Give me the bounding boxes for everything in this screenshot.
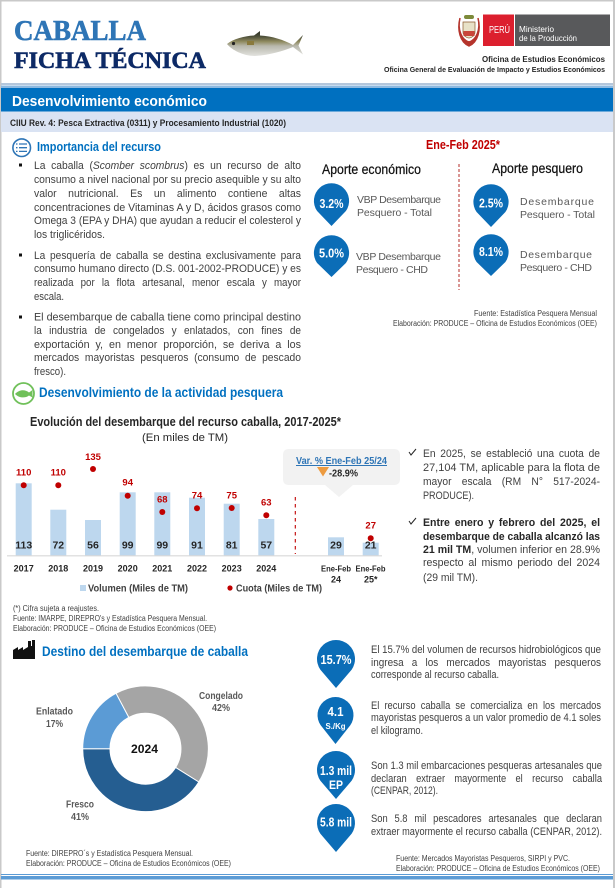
volume labels: 21 bbox=[365, 540, 377, 552]
text block: importancia del recurso: fresco). bbox=[34, 366, 66, 378]
text block: cuota y desembarque: Entre enero y febrero del 2025, el bbox=[423, 517, 600, 529]
quota labels: 63 bbox=[261, 498, 272, 508]
donut chart: 17% bbox=[46, 719, 63, 730]
volume labels: 29 bbox=[330, 540, 342, 552]
source note: mercados: Fuente: Mercados Mayoristas Pesqueros, SIRPI y PVC. bbox=[396, 854, 570, 863]
stat: 15.7%: 15.7% bbox=[320, 653, 352, 667]
axis labels: 2022 bbox=[187, 564, 207, 574]
volume labels: 91 bbox=[191, 540, 203, 552]
volume labels: 113 bbox=[15, 540, 32, 552]
source note: chart: Fuente: IMARPE, DIREPRO's y Estadística Pesquera Mensual. bbox=[13, 614, 207, 623]
axis labels: 2023 bbox=[222, 564, 242, 574]
label: desembarque CHD bbox=[520, 249, 592, 274]
stat: 15.7%: corresponde al recurso caballa. bbox=[371, 669, 499, 681]
stat: 1.3 mil EP: EP bbox=[329, 778, 343, 792]
source note: aporte: Fuente: Estadística Pesquera Mensual bbox=[474, 309, 597, 318]
axis labels: Ene-Feb bbox=[356, 564, 386, 574]
stat: 1.3 mil EP bbox=[317, 751, 603, 799]
volume labels: 72 bbox=[52, 540, 64, 552]
volume labels: 81 bbox=[226, 540, 238, 552]
text block: importancia del recurso bbox=[19, 160, 302, 378]
shield bbox=[458, 15, 480, 46]
text block: importancia del recurso: La pesquería de caballa se destina exclusivamente para bbox=[34, 250, 302, 262]
donut chart: Fresco bbox=[66, 800, 94, 810]
axis labels bbox=[14, 564, 385, 584]
volume labels: 99 bbox=[156, 540, 168, 552]
chart title: (En miles de TM) bbox=[142, 432, 228, 444]
axis labels: 2020 bbox=[118, 564, 138, 574]
axis labels: Ene-Feb bbox=[321, 564, 351, 574]
legend: Volumen (Miles de TM) bbox=[88, 582, 188, 594]
label: desembarque CHD: Desembarque bbox=[520, 249, 592, 261]
label: VBP total bbox=[357, 194, 441, 219]
text block: cuota y desembarque: desembarque de caballa alcanzó las bbox=[423, 531, 600, 543]
office names: Oficina General de Evaluación de Impacto y Estudios Económicos bbox=[384, 65, 605, 74]
axis labels: 2024 bbox=[256, 564, 276, 574]
label: desembarque total: Pesquero - Total bbox=[520, 209, 595, 221]
label: desembarque total bbox=[520, 196, 595, 221]
axis labels: 25* bbox=[364, 574, 378, 584]
label: VBP CHD: Pesquero - CHD bbox=[356, 264, 428, 276]
quota labels: 94 bbox=[122, 478, 134, 488]
text block: cuota y desembarque bbox=[409, 448, 600, 584]
text block: importancia del recurso: La caballa (Scomber scombrus) es un recurso de alto bbox=[34, 160, 301, 172]
text block: importancia del recurso: exportación y, en menor proporción, se deriva a los bbox=[34, 339, 301, 351]
pin: 2.5%: 2.5% bbox=[479, 196, 503, 210]
text block: importancia del recurso: consumo a nivel nacional por su precio asequible y su alto bbox=[34, 174, 301, 186]
axis labels: 24 bbox=[331, 574, 341, 584]
volume labels: 99 bbox=[122, 540, 134, 552]
callout: variation: Var. % Ene-Feb 25/24 bbox=[296, 456, 387, 467]
stat: 5.8 mil bbox=[317, 804, 602, 852]
donut chart: Congelado bbox=[199, 691, 243, 702]
axis labels: 2018 bbox=[48, 564, 68, 574]
heading: Desenvolvimiento de la actividad pesquera: Desenvolvimiento de la actividad pesquera bbox=[39, 384, 283, 400]
source note: chart bbox=[13, 604, 216, 633]
text block: importancia del recurso: realizada por la flota artesanal, menor escala y mayor bbox=[34, 277, 301, 289]
office names: Oficina de Estudios Económicos bbox=[482, 54, 605, 64]
pin: 3.2%: 3.2% bbox=[320, 197, 344, 211]
callout: variation bbox=[283, 449, 400, 497]
text block: cuota y desembarque: respecto al mismo periodo del 2024 bbox=[423, 557, 600, 569]
quota labels: 74 bbox=[192, 490, 203, 502]
stat: 4.1 S./Kg: 4.1 bbox=[328, 705, 344, 719]
text block: cuota y desembarque: (29 mil TM). bbox=[423, 572, 478, 584]
heading: Destino del desembarque de caballa: Destino del desembarque de caballa bbox=[42, 643, 248, 659]
text block: importancia del recurso: consumo humano directo (D.S. 001-2002-PRODUCE) y es bbox=[34, 263, 301, 275]
source note: donut: Fuente: DIREPRO´s y Estadística Pesquera Mensual. bbox=[26, 849, 193, 858]
title: CABALLA bbox=[14, 15, 146, 47]
source note: donut bbox=[26, 849, 231, 868]
quota labels: 27 bbox=[365, 520, 376, 532]
heading: aporte pesquero: Aporte pesquero bbox=[492, 160, 583, 176]
stat: 4.1 S./Kg bbox=[318, 697, 601, 744]
axis labels: 2017 bbox=[14, 564, 34, 574]
text block: cuota y desembarque: En 2025, se estableció una cuota de bbox=[423, 448, 600, 460]
label: VBP total: VBP Desembarque bbox=[357, 194, 441, 206]
label: VBP CHD bbox=[356, 251, 441, 276]
icon: check bbox=[409, 449, 416, 455]
quota labels: 75 bbox=[226, 490, 238, 502]
stat: 1.3 mil EP: 1.3 mil bbox=[320, 764, 352, 778]
pin: 5.0%: 5.0% bbox=[319, 246, 344, 260]
quota dots bbox=[21, 466, 374, 541]
heading: Ene-Feb 2025: Ene-Feb 2025* bbox=[426, 137, 501, 152]
title bbox=[14, 15, 206, 74]
stat: 4.1 S./Kg: el kilogramo. bbox=[371, 725, 423, 737]
quota labels: 68 bbox=[157, 494, 168, 506]
stat: 15.7% bbox=[317, 640, 601, 688]
heading: aporte económico: Aporte económico bbox=[322, 161, 421, 177]
donut chart: 41% bbox=[71, 812, 89, 823]
icon: check bbox=[409, 518, 416, 524]
quota labels bbox=[16, 452, 376, 532]
text block: importancia del recurso: escala. bbox=[34, 291, 64, 303]
text block: cuota y desembarque: PRODUCE). bbox=[423, 490, 474, 502]
text block: importancia del recurso: mercados mayoristas pesqueros (consumo de pescado bbox=[34, 352, 301, 364]
banner: Desenvolvimiento económico: Desenvolvimiento económico bbox=[12, 94, 207, 110]
CIIU band: CIIU Rev. 4: Pesca Extractiva (0311) y Procesamiento Industrial (1020) bbox=[10, 118, 286, 128]
callout: variation: -28.9% bbox=[329, 468, 358, 480]
text block: cuota y desembarque: mayor escala (RM N° 517-2024- bbox=[423, 476, 600, 488]
volume labels bbox=[15, 540, 377, 552]
icon: factory bbox=[13, 640, 35, 659]
source note: chart: (*) Cifra sujeta a reajustes. bbox=[13, 604, 99, 613]
quota labels: 135 bbox=[85, 452, 102, 463]
stat: 5.8 mil: 5.8 mil bbox=[320, 816, 352, 830]
chart title bbox=[30, 415, 341, 444]
icon: fish bbox=[227, 31, 303, 56]
logo: Ministerio de la Producción: Ministerio bbox=[519, 24, 554, 34]
source note: donut: Elaboración: PRODUCE – Oficina de Estudios Económicos (OEE) bbox=[26, 859, 231, 868]
title: FICHA TÉCNICA bbox=[14, 48, 206, 74]
text block: importancia del recurso: la industria de congelados y enlatados, con fines de bbox=[34, 325, 301, 337]
label: desembarque total: Desembarque bbox=[520, 196, 594, 208]
donut chart: 42% bbox=[212, 703, 230, 714]
quota labels: 110 bbox=[16, 468, 31, 478]
label: VBP CHD: VBP Desembarque bbox=[356, 251, 441, 263]
logo: Ministerio de la Producción: de la Producción bbox=[519, 33, 577, 43]
quota labels: 110 bbox=[51, 468, 66, 478]
volume labels: 57 bbox=[260, 540, 272, 552]
source note: chart: Elaboración: PRODUCE – Oficina de Estudios Económicos (OEE) bbox=[13, 624, 216, 633]
text block: importancia del recurso: Omega 3 (EPA y DHA) que ayudan a reducir el colesterol y bbox=[34, 215, 301, 227]
panel: aporte pesquero bbox=[473, 160, 595, 276]
text block: importancia del recurso: El desembarque de caballa tiene como principal destino bbox=[34, 312, 301, 324]
volume labels: 56 bbox=[87, 540, 99, 552]
label: VBP total: Pesquero - Total bbox=[357, 207, 432, 219]
donut chart: Enlatado bbox=[36, 706, 73, 718]
source note: aporte bbox=[393, 309, 597, 328]
text block: importancia del recurso: concentraciones de Vitaminas A y D, ácidos grasos como bbox=[34, 202, 301, 214]
text block: cuota y desembarque: 21 mil TM, volumen inferior en 28.9% bbox=[423, 544, 600, 556]
stat: 4.1 S./Kg: S./Kg bbox=[326, 721, 346, 731]
office names bbox=[384, 54, 605, 74]
text block: importancia del recurso: valor nutricional. Es un alimento contiene altas bbox=[34, 188, 301, 200]
legend bbox=[80, 582, 322, 594]
bars bbox=[16, 483, 379, 556]
text block: importancia del recurso: los triglicéridos. bbox=[34, 229, 105, 241]
logo: Ministerio de la Producción bbox=[458, 14, 610, 46]
axis labels: 2019 bbox=[83, 564, 103, 574]
text block: cuota y desembarque: 27,104 TM, aplicable para la flota de bbox=[423, 462, 600, 474]
chart title: Evolución del desembarque del recurso caballa, 2017-2025* bbox=[30, 415, 341, 429]
banner: Desenvolvimiento económico bbox=[1, 88, 613, 112]
label: desembarque CHD: Pesquero - CHD bbox=[520, 262, 592, 274]
source note: mercados bbox=[396, 854, 600, 873]
CIIU band bbox=[1, 112, 613, 132]
divider: dashed red bbox=[458, 164, 460, 290]
donut chart: 2024 bbox=[131, 742, 158, 756]
bar chart bbox=[7, 452, 386, 584]
axis labels: 2021 bbox=[152, 564, 172, 574]
legend: Cuota (Miles de TM) bbox=[236, 582, 322, 594]
pin: 8.1%: 8.1% bbox=[479, 245, 503, 259]
icon: list bbox=[13, 139, 30, 156]
panel: aporte económico bbox=[314, 161, 441, 277]
icon: green fish bbox=[13, 383, 34, 404]
logo: Ministerio de la Producción: PERÚ bbox=[489, 23, 510, 36]
stat: 1.3 mil EP: (CENPAR, 2012). bbox=[371, 785, 438, 797]
heading: Importancia del recurso: Importancia del recurso bbox=[37, 139, 161, 154]
donut chart bbox=[36, 686, 243, 823]
